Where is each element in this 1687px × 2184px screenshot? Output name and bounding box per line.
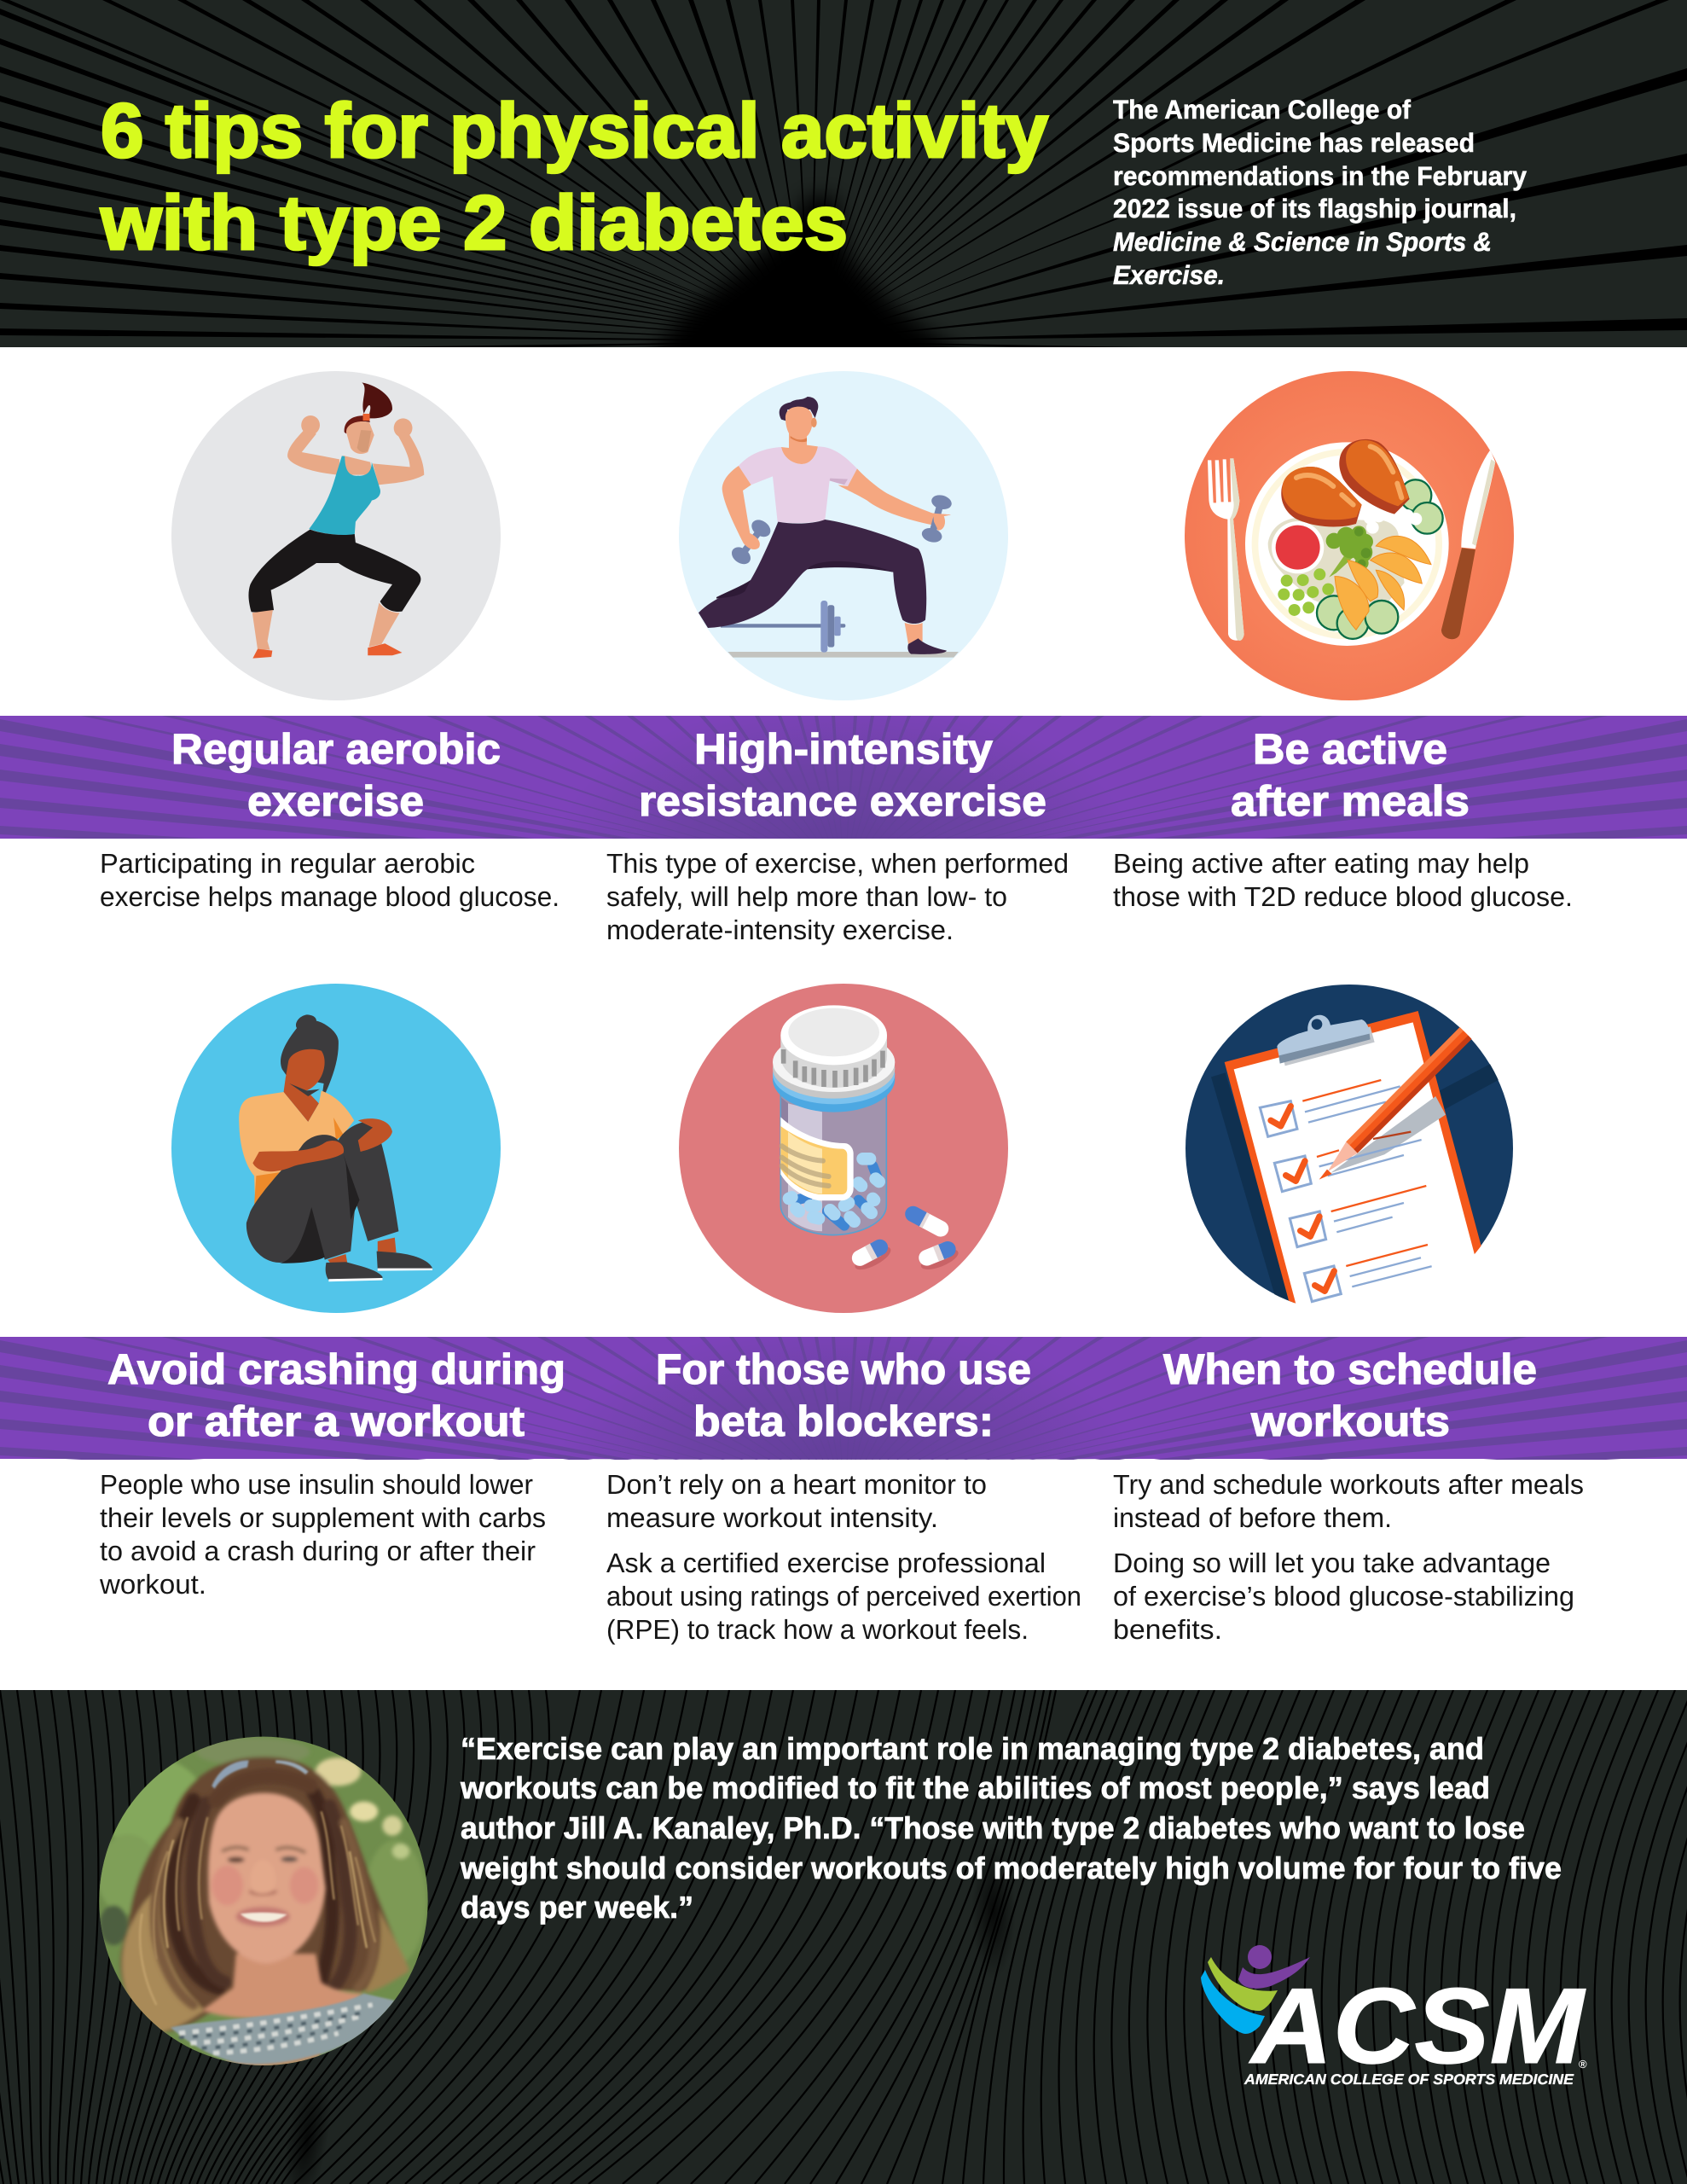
quote text: workouts can be modified to fit the abilities of most people,” says lead [460,1770,1490,1805]
quote text: weight should consider workouts of moderately high volume for four to five [460,1850,1562,1885]
text: be active after meals [1113,848,1573,912]
icon: man lunging with dumbbells [679,371,1008,700]
text: avoid crashing: People who use insulin should lower [100,1469,533,1500]
text: be active after meals: Being active after eating may help [1113,848,1529,879]
text: regular aerobic exercise: exercise helps manage blood glucose. [100,881,559,912]
text: beta blockers [606,1469,1081,1645]
text: when to schedule workouts: benefits. [1113,1614,1222,1645]
text: beta blockers: Ask a certified exercise professional [606,1548,1046,1578]
heading: beta blockers: For those who use [656,1345,1031,1393]
intro text: Medicine & Science in Sports & [1113,227,1492,257]
loose capsules [905,1206,948,1237]
icon: seated woman hugging knees [171,984,501,1313]
intro text: The American College of [1113,95,1412,125]
heading: when to schedule workouts [1163,1345,1537,1445]
text: regular aerobic exercise: Participating in regular aerobic [100,848,475,879]
icon: pill bottle [679,984,1008,1313]
heading: high-intensity resistance exercise [639,725,1046,825]
text: when to schedule workouts: instead of before them. [1113,1502,1392,1533]
intro text: Sports Medicine has released [1113,128,1475,158]
text: when to schedule workouts: Try and schedule workouts after meals [1113,1469,1584,1500]
text: avoid crashing: workout. [99,1569,206,1600]
heading: be active after meals [1231,725,1470,825]
cucumber slices top [1400,479,1431,511]
text: when to schedule workouts: of exercise’s blood glucose-stabilizing [1113,1581,1574,1612]
text: avoid crashing: their levels or supplement with carbs [100,1502,546,1533]
text: avoid crashing [99,1469,546,1600]
potato wedges [1335,536,1431,630]
text: be active after meals: those with T2D reduce blood glucose. [1113,881,1573,912]
panel: header [0,0,1687,367]
text: high-intensity resistance exercise: moderate-intensity exercise. [606,915,954,945]
heading: regular aerobic exercise [171,725,501,825]
text: beta blockers: (RPE) to track how a workout feels. [606,1614,1029,1645]
icon: woman doing aerobic squat [171,371,501,700]
text: high-intensity resistance exercise: This type of exercise, when performed [606,848,1069,879]
text: avoid crashing: to avoid a crash during or after their [100,1536,536,1566]
heading: when to schedule workouts: When to schedule [1163,1345,1537,1393]
text: when to schedule workouts [1113,1469,1584,1645]
board [1225,1011,1512,1414]
broccoli [1329,556,1353,577]
cap [773,1076,896,1112]
icon: plate of food [1185,371,1514,700]
drumsticks [1364,520,1376,524]
quote text [460,1731,1562,1925]
checklist lines [1305,1086,1432,1287]
text: beta blockers: Don’t rely on a heart monitor to [606,1469,987,1500]
heading: beta blockers: beta blockers: [693,1397,994,1445]
quote text: author Jill A. Kanaley, Ph.D. “Those with type 2 diabetes who want to lose [461,1810,1525,1845]
cucumber slices bottom [1317,595,1398,639]
fork [1208,458,1244,641]
plate [1245,442,1449,646]
text: regular aerobic exercise [100,848,559,912]
logo: ACSM [1201,1945,1587,2088]
band 2 with headings [0,1321,1687,1628]
title [100,89,1048,266]
heading: avoid crashing: or after a workout [148,1397,525,1445]
logo: ACSM: ACSM [1249,1966,1586,2086]
icon: clipboard checklist [1186,985,1513,1304]
text: high-intensity resistance exercise [606,848,1069,945]
intro text: Exercise. [1113,260,1225,290]
quote text: days per week.” [461,1890,693,1925]
band 1 with headings [0,716,1687,839]
bottle body [780,1095,886,1235]
logo: ACSM: AMERICAN COLLEGE OF SPORTS MEDICINE [1244,2071,1574,2088]
text: beta blockers: about using ratings of perceived exertion [606,1581,1081,1612]
footer wavy line background [0,1690,1687,2184]
paper [1234,1022,1504,1414]
text: beta blockers: measure workout intensity. [606,1502,938,1533]
panel: footer quote [0,1690,1687,2184]
pills inside [789,1159,879,1226]
quote text: “Exercise can play an important role in managing type 2 diabetes, and [461,1731,1484,1766]
text: when to schedule workouts: Doing so will let you take advantage [1113,1548,1551,1578]
title: 6 tips for physical activity [101,89,1048,174]
pencil [1346,1027,1472,1153]
peas [1278,568,1334,616]
heading: avoid crashing: Avoid crashing during [107,1345,565,1393]
heading: when to schedule workouts: workouts [1250,1397,1450,1445]
header sunburst background [0,0,1687,367]
intro text [1113,95,1528,290]
photo: lead author Jill A. Kanaley [94,1732,435,2073]
intro text: 2022 issue of its flagship journal, [1113,194,1516,224]
checkboxes [1260,1101,1341,1302]
title: with type 2 diabetes [100,181,848,266]
heading: be active after meals: Be active [1253,725,1447,773]
clip [1282,1026,1375,1066]
heading: regular aerobic exercise: exercise [247,777,424,825]
heading: be active after meals: after meals [1231,777,1470,825]
logo: ACSM: ® [1579,2058,1587,2071]
heading: high-intensity resistance exercise: High-intensity [694,725,993,773]
label [780,1117,854,1200]
text: high-intensity resistance exercise: safely, will help more than low- to [606,881,1007,912]
heading: regular aerobic exercise: Regular aerobic [171,725,501,773]
pencil shadow [1330,1096,1446,1173]
heading: beta blockers [656,1345,1031,1445]
heading: high-intensity resistance exercise: resistance exercise [639,777,1046,825]
heading: avoid crashing [107,1345,565,1445]
knife [1461,450,1495,549]
intro text: recommendations in the February [1113,161,1528,191]
sauce [1272,521,1324,573]
